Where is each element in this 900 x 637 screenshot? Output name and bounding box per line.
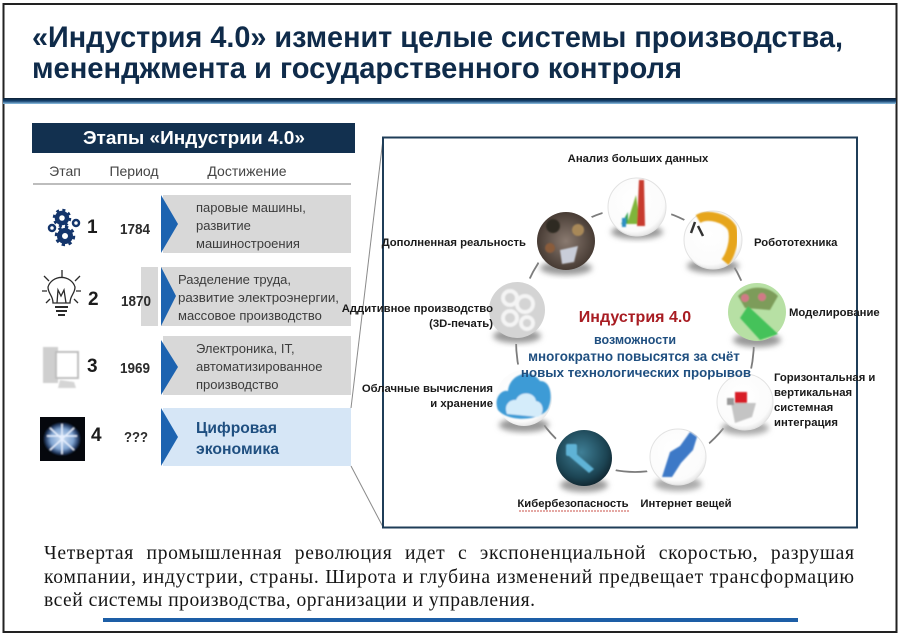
node: 3D printing <box>483 276 551 344</box>
row 1: 1784 <box>120 221 151 238</box>
ring <box>516 208 754 472</box>
row 3: Электроника, IT, <box>196 341 295 356</box>
column headers: Достижение <box>207 163 287 179</box>
panel: stages table <box>32 123 355 466</box>
row 2: массовое производство <box>178 308 322 323</box>
title: «Индустрия 4.0» изменит целые системы производства, <box>32 21 843 54</box>
node labels: Горизонтальная и <box>774 372 875 384</box>
node: cloud <box>490 364 558 432</box>
node labels: Интернет вещей <box>640 498 732 510</box>
title <box>32 21 843 85</box>
node labels: Аддитивное производство <box>342 303 493 315</box>
node labels: Анализ больших данных <box>568 153 709 165</box>
center label: Индустрия 4.0 <box>579 309 691 326</box>
node: internet of things <box>644 423 712 491</box>
icon: computer <box>43 347 78 388</box>
node: integration <box>711 368 779 436</box>
node labels: системная <box>774 402 833 414</box>
row 2: 2 <box>88 289 99 310</box>
table heading: Этапы «Индустрии 4.0» <box>83 127 305 148</box>
row 1: паровые машины, <box>196 200 306 215</box>
zoom connector lines <box>351 139 383 527</box>
node labels: и хранение <box>430 398 493 410</box>
summary text: компании, индустрии, страны. Широта и глубина изменений предвещает трансформацию <box>44 567 854 588</box>
node: cybersecurity <box>550 424 618 492</box>
row 2: развитие электроэнергии, <box>178 290 339 305</box>
column headers <box>33 163 351 185</box>
row 1 <box>49 195 351 253</box>
icon: light bulb <box>42 270 81 315</box>
summary text: Четвертая промышленная революция идет с экспоненциальной скоростью, разрушая <box>44 543 854 564</box>
node labels: интеграция <box>774 417 838 429</box>
summary text: всей системы производства, организации и управления. <box>44 590 535 611</box>
row 2: Разделение труда, <box>178 272 291 287</box>
row 3: автоматизированное <box>196 359 322 374</box>
node: modeling <box>722 277 792 347</box>
summary text <box>44 543 854 611</box>
row 3: производство <box>196 377 278 392</box>
row 4: 4 <box>91 425 102 446</box>
row 1: машиностроения <box>196 236 300 251</box>
row 4: Цифровая <box>196 420 277 437</box>
center label <box>521 309 751 380</box>
center label: новых технологических прорывов <box>521 365 751 380</box>
row 4 <box>40 408 351 466</box>
row 1: 1 <box>87 217 98 238</box>
title rule <box>3 98 896 104</box>
row 2 <box>42 267 351 326</box>
node labels: Кибербезопасность <box>517 498 629 510</box>
node labels: Моделирование <box>789 307 880 319</box>
row 2: 1870 <box>121 293 151 310</box>
node: augmented reality <box>531 206 601 276</box>
node labels: вертикальная <box>774 387 852 399</box>
footer rule <box>103 618 798 622</box>
icon: digital brain <box>40 417 85 461</box>
center label: возможности <box>594 333 676 347</box>
icon: gears <box>49 210 79 245</box>
row 4: ??? <box>124 429 148 446</box>
node labels: Облачные вычисления <box>362 383 493 395</box>
node labels: Дополненная реальность <box>382 237 526 249</box>
node: robotics <box>678 205 748 275</box>
table heading <box>32 123 355 153</box>
column headers: Этап <box>49 163 81 179</box>
node labels <box>342 153 880 511</box>
title: мененджмента и государственного контроля <box>32 52 682 85</box>
node labels: (3D-печать) <box>429 318 493 330</box>
row 3 <box>43 336 351 395</box>
row 3: 3 <box>87 356 98 377</box>
node labels: Робототехника <box>754 237 838 249</box>
center label: многократно повысятся за счёт <box>528 349 740 364</box>
node: big data <box>602 172 672 242</box>
row 4: экономика <box>196 441 279 458</box>
row 3: 1969 <box>120 360 150 377</box>
panel: industry 4.0 capabilities <box>342 138 880 528</box>
column headers: Период <box>109 163 159 179</box>
row 1: развитие <box>196 218 251 233</box>
